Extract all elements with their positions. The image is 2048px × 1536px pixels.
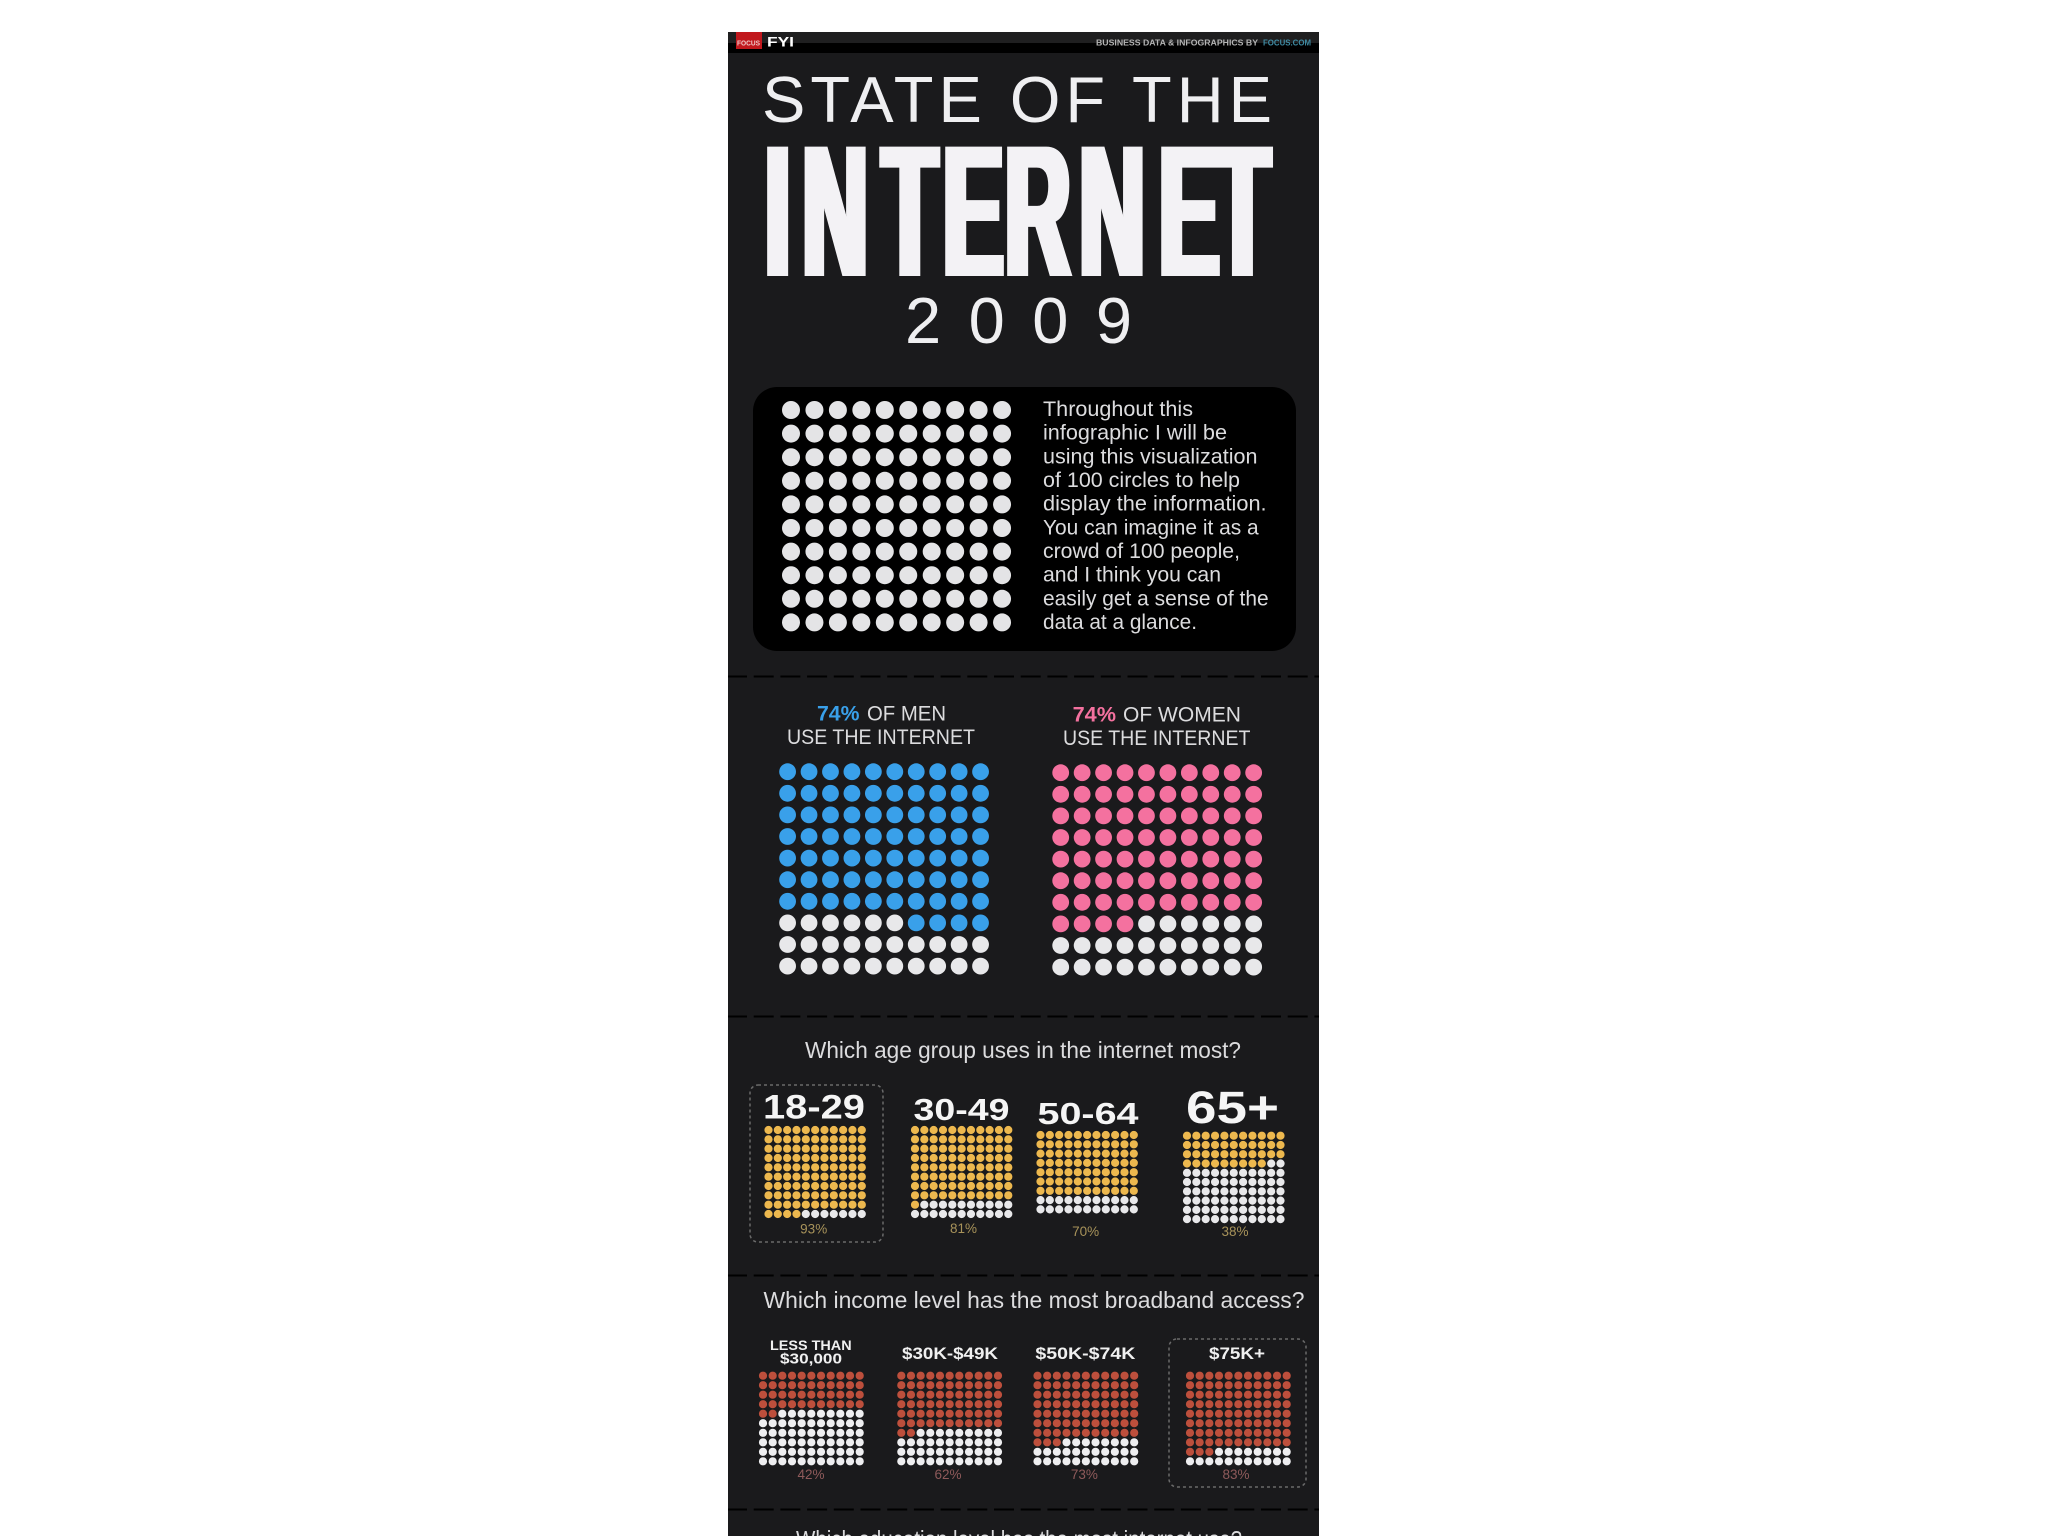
label: 18-29 [763, 1089, 865, 1127]
label: $75K+ [1209, 1344, 1265, 1363]
panel: women statistic [1061, 704, 1254, 967]
white dots [763, 1414, 860, 1461]
label line 2: $30,000 [780, 1351, 842, 1368]
income $50K-$74K [1035, 1344, 1136, 1482]
logo text: FYI: FYI [767, 34, 794, 50]
title: internet: INTERNET [765, 108, 1270, 317]
title: state of the: STATE OF THE [762, 63, 1272, 136]
intro text [1043, 398, 1269, 634]
percent: 38% [1221, 1224, 1249, 1239]
intro text: Throughout this [1043, 398, 1193, 421]
intro text: and I think you can [1043, 564, 1221, 587]
intro circle grid of 100 [791, 410, 1002, 622]
title: year 2009: 2009 [905, 284, 1132, 357]
white dots [901, 1433, 998, 1461]
percent: 70% [1072, 1224, 1099, 1239]
men heading line 2: USE THE INTERNET [787, 726, 975, 749]
panel: infographic background [728, 32, 1319, 1536]
heading: income question: Which income level has the most broadband access? [764, 1287, 1304, 1313]
panel: men statistic [787, 703, 981, 966]
yellow dots [768, 1130, 862, 1214]
age group 18-29 [750, 1085, 883, 1242]
yellow dots [1187, 1136, 1281, 1164]
intro text: You can imagine it as a [1043, 516, 1259, 539]
age group 50-64 [1038, 1096, 1139, 1239]
women pink dots [1061, 773, 1254, 924]
men heading: 74% [817, 703, 860, 726]
label: 65+ [1186, 1082, 1279, 1133]
logo: focus red square [736, 32, 762, 49]
red dots [901, 1376, 998, 1433]
highlight box [1169, 1339, 1306, 1487]
white dots [1040, 1200, 1134, 1209]
men blue dots [788, 772, 981, 923]
intro text: data at a glance. [1043, 611, 1197, 634]
women heading: 74% [1073, 704, 1116, 727]
label: 30-49 [914, 1092, 1010, 1127]
highlight box [750, 1085, 883, 1242]
income less than $30,000 [763, 1337, 860, 1482]
men heading: OF MEN [867, 703, 946, 726]
percent: 73% [1071, 1467, 1098, 1482]
white dots [1190, 1452, 1287, 1461]
age group 65+ [1186, 1082, 1281, 1239]
percent: 81% [950, 1221, 977, 1236]
intro text: infographic I will be [1043, 422, 1227, 445]
intro text: using this visualization [1043, 445, 1258, 468]
percent: 83% [1222, 1467, 1250, 1482]
age group 30-49 [914, 1092, 1010, 1236]
red dots [763, 1376, 860, 1414]
intro text: display the information. [1043, 493, 1267, 516]
label: $50K-$74K [1035, 1344, 1136, 1363]
intro text: of 100 circles to help [1043, 469, 1240, 492]
yellow dots [1040, 1135, 1134, 1191]
intro text: crowd of 100 people, [1043, 540, 1240, 563]
red dots [1038, 1376, 1135, 1442]
red dots [1190, 1376, 1287, 1452]
percent: 42% [797, 1467, 825, 1482]
yellow dots [915, 1130, 1009, 1205]
panel: intro black box [753, 387, 1296, 651]
header bar [728, 32, 1319, 53]
heading: age group question: Which age group uses in the internet most? [805, 1037, 1241, 1063]
white dots [1187, 1164, 1281, 1219]
percent: 93% [800, 1222, 827, 1237]
income $75K+ [1169, 1339, 1306, 1487]
logo text: focus: FOCUS [737, 38, 760, 48]
men white dots [788, 923, 981, 966]
label: 50-64 [1038, 1096, 1139, 1131]
label: $30K-$49K [902, 1344, 999, 1363]
white dots [806, 1210, 862, 1218]
income $30K-$49K [901, 1344, 999, 1482]
women white dots [1061, 924, 1254, 967]
white dots [1038, 1442, 1135, 1461]
women heading: OF WOMEN [1123, 704, 1241, 727]
intro text: easily get a sense of the [1043, 587, 1269, 610]
women heading line 2: USE THE INTERNET [1063, 727, 1251, 750]
header credit: BUSINESS DATA & INFOGRAPHICS BY [1096, 38, 1259, 48]
header credit link: FOCUS.COM [1263, 38, 1311, 48]
white dots [915, 1205, 1009, 1214]
percent: 62% [934, 1467, 962, 1482]
label line 1: LESS THAN [770, 1337, 852, 1353]
